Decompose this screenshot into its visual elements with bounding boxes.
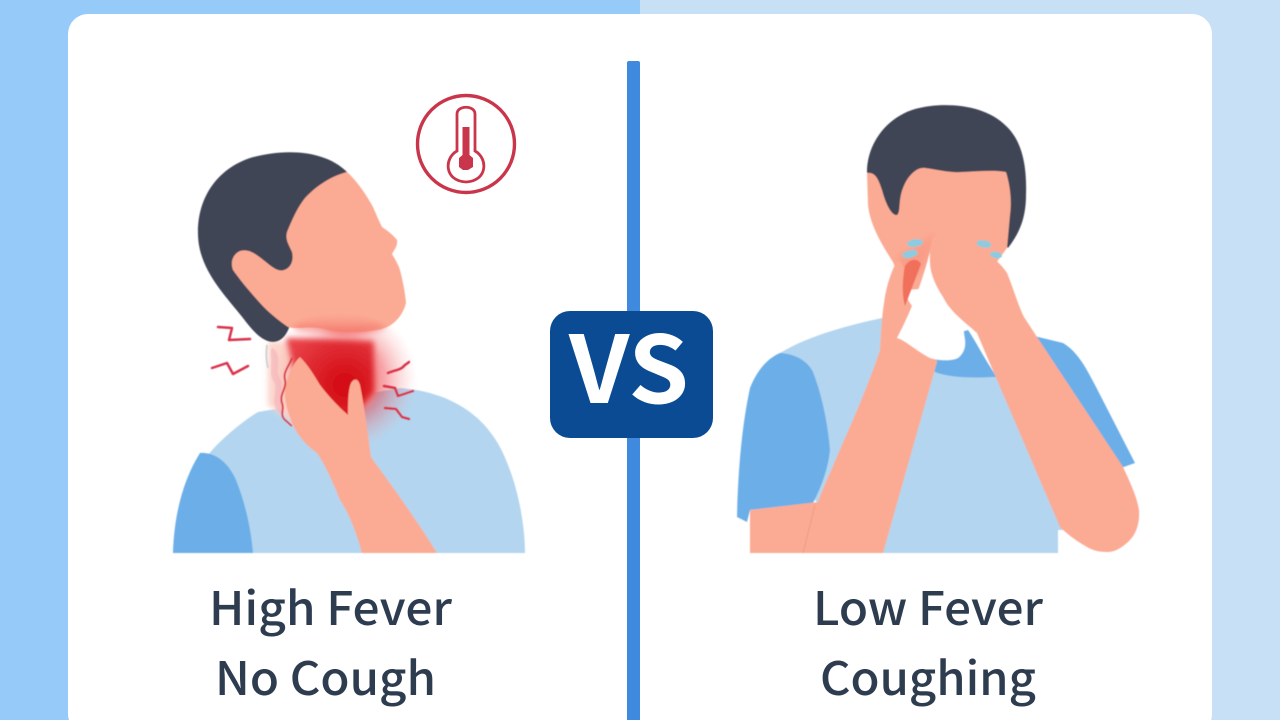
- illustration: person with sore throat: [173, 152, 525, 553]
- sleeve: left: [737, 353, 830, 522]
- icon: thermometer: [418, 96, 514, 192]
- shirt: collar: [920, 330, 1000, 382]
- label: right symptoms: Low Fever: [813, 573, 1043, 639]
- label: left symptoms: High Fever: [209, 573, 452, 639]
- tissue: [897, 243, 965, 360]
- VS badge: VS: [568, 295, 689, 430]
- pain veins: [281, 358, 292, 426]
- shirt: back sleeve right: [1030, 335, 1135, 469]
- throat inflammation glow: [273, 306, 417, 450]
- tears and droplets: [901, 238, 1002, 260]
- illustration: person coughing into tissue: [737, 105, 1139, 553]
- throat: inflamed red area: [286, 338, 374, 420]
- forearm: left: [803, 261, 937, 553]
- nose redness: [897, 232, 938, 285]
- arm crease: [803, 505, 815, 553]
- face: [232, 172, 406, 332]
- label: right symptoms: Coughing: [820, 643, 1036, 709]
- label: left symptoms: No Cough: [215, 643, 436, 709]
- label: left symptoms: [209, 573, 452, 709]
- background: left half: [0, 0, 640, 720]
- shirt: front panel: [883, 372, 1075, 553]
- face: [867, 168, 1011, 290]
- upper arm: left: [750, 502, 830, 553]
- red finger shadow: [903, 260, 921, 306]
- neck texture: [272, 352, 281, 410]
- shirt: torso: [780, 318, 1058, 553]
- sleeve: shoulder shade: [173, 453, 253, 553]
- shirt: shoulders: [173, 388, 525, 553]
- neck: [268, 340, 376, 425]
- hand and forearm: [285, 357, 437, 553]
- hand and forearm: right: [930, 226, 1139, 552]
- pain lines: right: [384, 362, 413, 419]
- chin redness: [292, 316, 387, 335]
- pain lines: left: [212, 327, 250, 374]
- divider line: [627, 61, 640, 720]
- background: right half: [640, 0, 1280, 720]
- VS badge: [550, 295, 713, 438]
- label: right symptoms: [813, 573, 1043, 709]
- hair: [198, 152, 347, 342]
- neck outline: [266, 345, 268, 368]
- hair: [867, 105, 1026, 248]
